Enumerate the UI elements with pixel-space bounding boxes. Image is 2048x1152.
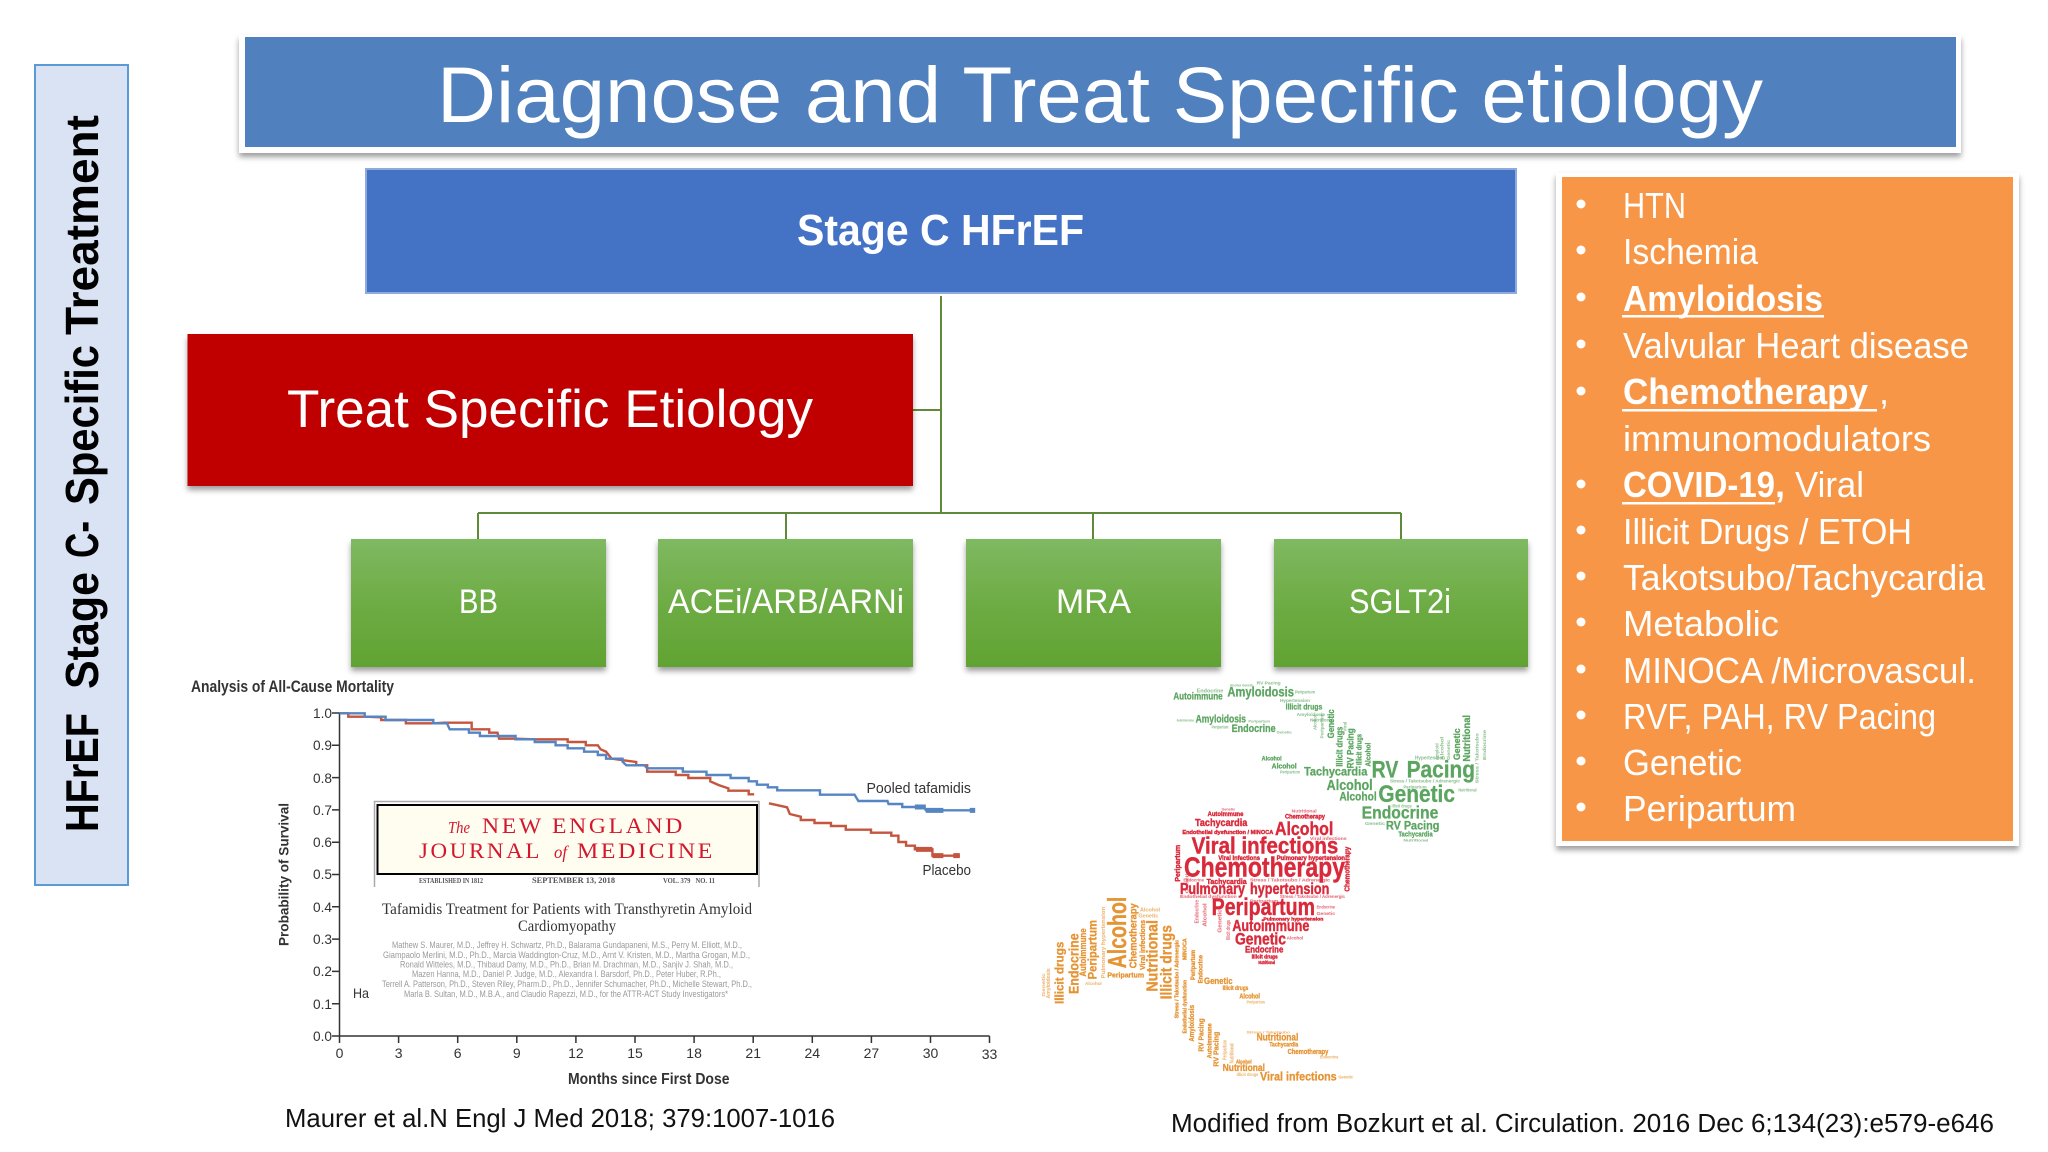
list text: , <box>1775 464 1785 505</box>
word cloud: orange kidney and vessel shape: Alcohol <box>1140 908 1161 914</box>
word cloud: red heart shape: Alcohol <box>1275 818 1333 839</box>
word cloud: green lungs shape: Pacing <box>1407 756 1475 783</box>
word cloud: orange kidney and vessel shape: Illicit drugs <box>1159 925 1176 999</box>
word cloud: green lungs shape: Viral <box>1343 722 1348 732</box>
word cloud: green lungs shape: Nutritional <box>1403 839 1428 843</box>
journal masthead: JOURNAL <box>419 838 542 863</box>
hazard ratio fragment: Ha <box>353 985 369 1001</box>
word cloud: orange kidney and vessel shape: Viral infections <box>1260 1070 1337 1084</box>
word cloud: red heart shape: Endocrine <box>1194 900 1200 923</box>
word cloud: orange kidney and vessel shape: Viral infections <box>1140 920 1147 970</box>
citation: Bozkurt: Modified from Bozkurt et al. Circulation. 2016 Dec 6;134(23):e579-e646 <box>1171 1110 1994 1138</box>
word cloud: red heart shape: Pulmonary hypertension <box>1277 856 1345 862</box>
y tick labels: 0.6 <box>313 834 332 850</box>
word cloud: green lungs shape: Autoimmune <box>1173 691 1223 702</box>
list text: Viral <box>1795 464 1864 505</box>
word cloud: green lungs shape: RV <box>1372 756 1398 783</box>
journal masthead: MEDICINE <box>577 838 715 863</box>
word cloud: orange kidney and vessel shape: Chemotherapy <box>1288 1049 1328 1056</box>
word cloud: green lungs shape: Tachycardia <box>1398 830 1433 839</box>
word cloud: red heart shape: Nutritional <box>1292 809 1317 814</box>
word cloud: green lungs shape: Alcohol <box>1327 778 1373 794</box>
journal masthead: of <box>554 842 570 862</box>
authors: Giampaolo Merlini, M.D., Ph.D., Marcia Waddington-Cruz, M.D., Arnt V. Kristen, M.D., Martha Grogan, M.D., <box>383 950 750 961</box>
word cloud: green lungs shape: Peripartum <box>1403 784 1427 789</box>
word cloud: green lungs shape: Amyloidosis <box>1227 684 1294 700</box>
word cloud: green lungs shape: Peripartum <box>1295 689 1315 694</box>
word cloud: green lungs shape: Alcohol <box>1439 736 1445 760</box>
article title: Cardiomyopathy <box>518 918 616 935</box>
word cloud: red heart shape: Alcohol <box>1203 903 1209 927</box>
word cloud: orange kidney and vessel shape: Illicit drugs <box>1223 985 1249 992</box>
word cloud: green lungs shape: Illicit drugs <box>1357 734 1364 765</box>
box: SGLT2i: SGLT2i <box>1349 583 1451 621</box>
word cloud: orange kidney and vessel shape: Genetic <box>1204 976 1233 986</box>
word cloud: green lungs shape: Illicit drugs <box>1286 701 1322 711</box>
y tick labels: 0.8 <box>313 770 332 786</box>
word cloud: green lungs shape: Alcohol <box>1364 743 1373 767</box>
word cloud: orange kidney and vessel shape: Endothelial dysfunction <box>1183 980 1189 1033</box>
x tick labels: 33 <box>982 1046 997 1062</box>
word cloud: orange kidney and vessel shape: Nutritional <box>1223 1063 1265 1074</box>
x axis label: Months since First Dose <box>568 1071 730 1088</box>
word cloud: orange kidney and vessel shape: Pulmonary hypertension <box>1101 907 1107 978</box>
word cloud: orange kidney and vessel shape: Alcohol <box>1102 897 1132 968</box>
list text: Ischemia <box>1623 231 1759 272</box>
word cloud: green lungs shape: Peripartum <box>1212 724 1228 729</box>
word cloud: red heart shape: Chemotherapy <box>1342 846 1351 892</box>
word cloud: orange kidney and vessel shape: MINOCA <box>1183 938 1189 960</box>
word cloud: green lungs shape: Alcohol Genetic <box>1230 683 1254 688</box>
box: ACEi/ARB/ARNi: ACEi/ARB/ARNi <box>668 583 904 621</box>
word cloud: orange kidney and vessel shape: Stress / Takotsubo / Adrenergic <box>1174 940 1180 1018</box>
authors <box>382 940 752 1000</box>
panel: vertical stage label: Specific <box>56 345 108 505</box>
x tick labels: 24 <box>805 1045 820 1061</box>
word cloud: orange kidney and vessel shape: Peripartum <box>1107 971 1144 980</box>
word cloud: green lungs shape: Endocrine <box>1482 730 1488 760</box>
box: BB: BB <box>459 583 498 621</box>
y axis label: Probability of Survival <box>276 803 292 946</box>
x tick labels: 6 <box>454 1045 462 1061</box>
box: MRA: MRA <box>1056 583 1131 621</box>
word cloud: green lungs shape: Genetic <box>1378 781 1455 808</box>
box: Stage C HFrEF <box>366 169 1516 293</box>
word cloud: red heart shape: Peripartum <box>1175 845 1182 882</box>
panel: vertical stage label: HFrEF <box>56 713 108 832</box>
word cloud: green lungs shape: Hypertension <box>1415 755 1445 761</box>
word cloud: green lungs shape: Alcohol <box>1262 756 1282 763</box>
word cloud: orange kidney and vessel shape <box>1041 897 1354 1084</box>
word cloud: orange kidney and vessel shape: Alcohol <box>1085 981 1102 986</box>
word cloud: green lungs shape: Amyloid <box>1434 743 1439 760</box>
word cloud: green lungs shape: Alcohol <box>1339 791 1377 804</box>
word cloud: green lungs shape: Alcohol <box>1272 761 1297 770</box>
word cloud: orange kidney and vessel shape: Genetic <box>1138 914 1158 920</box>
connector lines <box>478 296 1401 539</box>
y tick labels: 1.0 <box>313 705 332 721</box>
panel: etiology list <box>1556 173 2019 846</box>
word cloud: green lungs shape: Amyloidosis <box>1297 712 1325 718</box>
word cloud: red heart shape: Nutritional <box>1258 960 1275 965</box>
journal masthead: NEW ENGLAND <box>482 813 685 838</box>
curve label: placebo: Placebo <box>922 862 971 879</box>
list text: , <box>1879 371 1889 412</box>
article title <box>382 901 752 935</box>
word cloud: orange kidney and vessel shape: Alcohol <box>1239 991 1260 1000</box>
word cloud: orange kidney and vessel shape: Autoimmune <box>1078 928 1088 977</box>
word cloud: red heart shape: Genetic <box>1235 930 1286 949</box>
list text: immunomodulators <box>1623 418 1931 459</box>
word cloud: red heart shape: Autoimmune <box>1208 811 1244 818</box>
word cloud: orange kidney and vessel shape: Nutritional <box>1144 920 1161 992</box>
word cloud: green lungs shape: Stress / Takotsubo <box>1474 733 1480 783</box>
word cloud: orange kidney and vessel shape: Illicit drugs <box>1052 942 1066 1004</box>
title banner: Diagnose and Treat Specific etiology <box>437 50 1764 139</box>
word cloud: red heart shape: Genetic <box>1184 869 1189 893</box>
x tick labels: 12 <box>568 1045 584 1061</box>
word cloud: orange kidney and vessel shape: Endocrine <box>1198 955 1205 983</box>
y tick labels <box>313 705 332 1044</box>
word cloud: orange kidney and vessel shape: Endocrine <box>1320 1055 1339 1060</box>
panel: vertical stage label: C- <box>56 521 108 558</box>
word cloud: red heart shape: Viral infections <box>1192 832 1338 858</box>
x tick labels: 0 <box>336 1045 344 1061</box>
y tick labels: 0.5 <box>313 866 332 882</box>
survival curves <box>339 713 975 856</box>
word cloud: green lungs shape: Peripartum <box>1319 713 1325 738</box>
panel: vertical stage label <box>35 65 128 885</box>
y tick labels: 0.3 <box>313 931 332 947</box>
word cloud: red heart shape: Pulmonary <box>1180 881 1245 898</box>
list text: HTN <box>1623 185 1686 226</box>
word cloud: green lungs shape: Amyloidosis <box>1196 714 1246 726</box>
axes and ticks <box>332 713 990 1043</box>
word cloud: red heart shape: Alcohol <box>1287 935 1303 940</box>
word cloud: red heart shape: Tachycardia <box>1195 818 1248 829</box>
panel: vertical stage label: Stage <box>56 572 108 689</box>
list text: Amyloidosis <box>1623 278 1823 319</box>
y tick labels: 0.4 <box>313 899 332 915</box>
word cloud: green lungs shape: Hypertension <box>1280 698 1310 704</box>
word cloud: orange kidney and vessel shape: RV Pacing <box>1196 1018 1205 1052</box>
word cloud: red heart shape: Genetic <box>1218 909 1224 933</box>
y tick labels: 0.1 <box>313 996 332 1012</box>
word cloud: green lungs shape: Genetic <box>1365 821 1385 826</box>
list text: Chemotherapy <box>1623 371 1868 412</box>
word cloud: orange kidney and vessel shape: Alcohol <box>1236 1059 1252 1065</box>
x tick labels: 30 <box>923 1045 938 1061</box>
word cloud: orange kidney and vessel shape: Illicit drugs <box>1237 1072 1259 1077</box>
word cloud: orange kidney and vessel shape: Nutritional <box>1257 1033 1299 1044</box>
authors: Marla B. Sultan, M.D., M.B.A., and Claudio Rapezzi, M.D., for the ATTR-ACT Study Investigators* <box>404 989 728 1000</box>
word cloud: orange kidney and vessel shape: Nutritional <box>1229 1043 1235 1063</box>
word cloud: orange kidney and vessel shape: Amyloidosis <box>1187 1005 1196 1042</box>
word cloud: green lungs shape: Stress / Takotsubo / Adrenergic <box>1390 779 1461 784</box>
word cloud: orange kidney and vessel shape: Stress / Takotsubo <box>1247 1029 1291 1034</box>
box: SGLT2i <box>1274 539 1528 667</box>
word cloud: orange kidney and vessel shape: Tachycardia <box>1269 1043 1299 1049</box>
list text: Valvular Heart disease <box>1623 325 1969 366</box>
citation: Maurer: Maurer et al.N Engl J Med 2018; 379:1007-1016 <box>285 1103 835 1133</box>
word cloud: red heart shape: Viral infections <box>1310 836 1347 841</box>
x tick labels: 15 <box>627 1045 643 1061</box>
word cloud: green lungs shape: Nutritional <box>1458 788 1477 793</box>
word cloud: green lungs shape: Genetic <box>1277 729 1292 734</box>
box: MRA <box>966 539 1221 667</box>
y tick labels: 0.9 <box>313 737 332 753</box>
word cloud: red heart shape: Chemotherapy <box>1285 814 1325 821</box>
word cloud: green lungs shape: Genetic <box>1446 740 1452 760</box>
word cloud: red heart shape: Illicit drugs <box>1252 954 1278 960</box>
word cloud: green lungs shape: Peripartum <box>1248 719 1270 724</box>
word cloud: green lungs shape: Endocrine <box>1232 723 1276 735</box>
word cloud: red heart shape: Illicit drugs <box>1226 920 1232 940</box>
word cloud: green lungs shape: RV Pacing <box>1345 728 1355 768</box>
box: BB <box>351 539 606 667</box>
word cloud: green lungs shape: Peripartum <box>1280 769 1300 774</box>
word cloud: red heart shape: Peripartum <box>1212 894 1315 921</box>
word cloud: green lungs shape: Endocrine <box>1197 689 1223 695</box>
list text <box>1622 185 1986 829</box>
word cloud: red heart shape: Stress / Takotsubo / Adrenergic <box>1250 877 1330 882</box>
word cloud: orange kidney and vessel shape: Peripartum <box>1190 950 1197 980</box>
list text: Metabolic <box>1623 603 1779 644</box>
word cloud: orange kidney and vessel shape: Genetic <box>1041 973 1046 997</box>
title banner <box>239 35 1961 153</box>
word cloud: red heart shape: Endocrine <box>1245 945 1283 955</box>
authors: Ronald Witteles, M.D., Thibaud Damy, M.D., Ph.D., Brian M. Drachman, M.D., Sanjiv J. Shah, M.D., <box>400 960 733 970</box>
word cloud: red heart shape: Genetic <box>1317 911 1335 917</box>
x tick labels: 9 <box>513 1045 521 1061</box>
word cloud: red heart shape: hypertension <box>1250 881 1329 898</box>
issue line: VOL. 379 NO. 11 <box>663 877 715 885</box>
authors: Terrell A. Patterson, Ph.D., Steven Riley, Pharm.D., Ph.D., Jennifer Schumacher, Ph.D., Michelle Stewart, Ph.D., <box>382 979 752 990</box>
authors: Mazen Hanna, M.D., Daniel P. Judge, M.D., Alexandra I. Barsdorf, Ph.D., Peter Huber, R.Ph., <box>412 969 721 980</box>
y tick labels: 0.0 <box>313 1028 332 1044</box>
word cloud: red heart shape: Endocrine <box>1183 878 1205 883</box>
word cloud: red heart shape: Peripartum <box>1250 899 1279 904</box>
authors: Mathew S. Maurer, M.D., Jeffrey H. Schwartz, Ph.D., Balarama Gundapaneni, M.S., Perry M. Elliott, M.D., <box>392 940 742 951</box>
issue line: SEPTEMBER 13, 2018 <box>532 876 615 885</box>
x tick labels: 18 <box>686 1045 702 1061</box>
word cloud: orange kidney and vessel shape: RV Pacing <box>1211 1031 1220 1067</box>
box: Treat Specific Etiology <box>188 334 913 486</box>
y tick labels: 0.2 <box>313 963 332 979</box>
box: Treat Specific Etiology: Treat Specific Etiology <box>287 380 813 439</box>
word cloud: red heart shape: Endocrine <box>1317 904 1335 910</box>
list text: Genetic <box>1623 742 1742 783</box>
word cloud: red heart shape: Viral infections <box>1218 855 1260 862</box>
list text: RVF, PAH, RV Pacing <box>1623 696 1936 737</box>
word cloud: orange kidney and vessel shape: Peripartum <box>1223 1040 1229 1060</box>
word cloud: orange kidney and vessel shape: Endocrine <box>1065 933 1081 994</box>
word cloud: green lungs shape: Illicit drugs <box>1335 727 1345 767</box>
word cloud: red heart shape: Tachycardia <box>1207 879 1247 886</box>
word cloud: red heart shape <box>1175 807 1351 965</box>
word cloud: green lungs shape: RV Pacing <box>1257 681 1281 687</box>
word cloud: red heart shape: Stress / Takotsubo / Adrenergic <box>1280 894 1345 899</box>
word cloud: green lungs shape: Alcohol <box>1313 715 1318 730</box>
word cloud: orange kidney and vessel shape: Chemotherapy <box>1129 903 1140 968</box>
box: ACEi/ARB/ARNi <box>658 539 913 667</box>
word cloud: green lungs shape: Autoimmune <box>1177 718 1194 722</box>
word cloud: orange kidney and vessel shape: Autoimmune <box>1207 1023 1214 1058</box>
word cloud: green lungs shape: Illicit drugs <box>1392 803 1412 808</box>
x tick labels <box>336 1045 997 1062</box>
word cloud: green lungs shape: Endocrine <box>1362 802 1438 822</box>
list text: Peripartum <box>1623 788 1796 829</box>
chart: Kaplan-Meier survival <box>191 677 997 1088</box>
word cloud: orange kidney and vessel shape: Peripartum <box>1086 920 1100 979</box>
word cloud: orange kidney and vessel shape: Peripartum <box>1247 999 1265 1004</box>
inset: NEJM article header <box>372 797 768 1005</box>
list text: COVID-19 <box>1623 464 1775 505</box>
word cloud: green lungs shape: Genetic <box>1326 709 1336 738</box>
curve label: pooled tafamidis: Pooled tafamidis <box>866 780 971 797</box>
word cloud: red heart shape: Genetic <box>1222 807 1236 812</box>
box: Stage C HFrEF: Stage C HFrEF <box>797 206 1084 255</box>
word cloud: green lungs shape <box>1173 681 1488 843</box>
word cloud: green lungs shape: Nutritional <box>1462 715 1473 762</box>
bullets <box>1576 200 1586 812</box>
journal masthead <box>378 805 757 874</box>
word cloud: red heart shape: Pulmonary hypertension <box>1263 917 1324 922</box>
chart title: Analysis of All-Cause Mortality <box>191 677 394 696</box>
x tick labels: 21 <box>745 1045 761 1061</box>
word cloud: red heart shape: Endothelial dysfunction / MINOCA <box>1182 830 1273 836</box>
issue line: ESTABLISHED IN 1812 <box>419 877 483 885</box>
word cloud: red heart shape: Chemotherapy <box>1184 852 1345 883</box>
word cloud: orange kidney and vessel shape: Genetic <box>1338 1074 1354 1079</box>
list text: Illicit Drugs / ETOH <box>1623 511 1912 552</box>
word cloud: green lungs shape: Tachycardia <box>1304 765 1367 779</box>
panel: vertical stage label: Treatment <box>56 115 108 335</box>
word cloud: green lungs shape: Nutritional <box>1310 718 1333 723</box>
word cloud: green lungs shape: RV Pacing <box>1386 818 1439 832</box>
journal masthead: The <box>448 818 470 837</box>
issue line <box>419 876 715 885</box>
x tick labels: 27 <box>864 1045 879 1061</box>
word cloud: green lungs shape: Genetic <box>1452 728 1462 760</box>
x tick labels: 3 <box>395 1045 403 1061</box>
y tick labels: 0.7 <box>313 802 332 818</box>
word cloud: red heart shape: Endothelial dysfunction <box>1180 894 1237 899</box>
list text: MINOCA /Microvascul. <box>1623 650 1976 691</box>
word cloud: red heart shape: Autoimmune <box>1232 918 1309 935</box>
list text: Takotsubo/Tachycardia <box>1623 557 1986 598</box>
article title: Tafamidis Treatment for Patients with Transthyretin Amyloid <box>382 901 752 918</box>
word cloud: orange kidney and vessel shape: Amyloidosis <box>1046 968 1052 998</box>
